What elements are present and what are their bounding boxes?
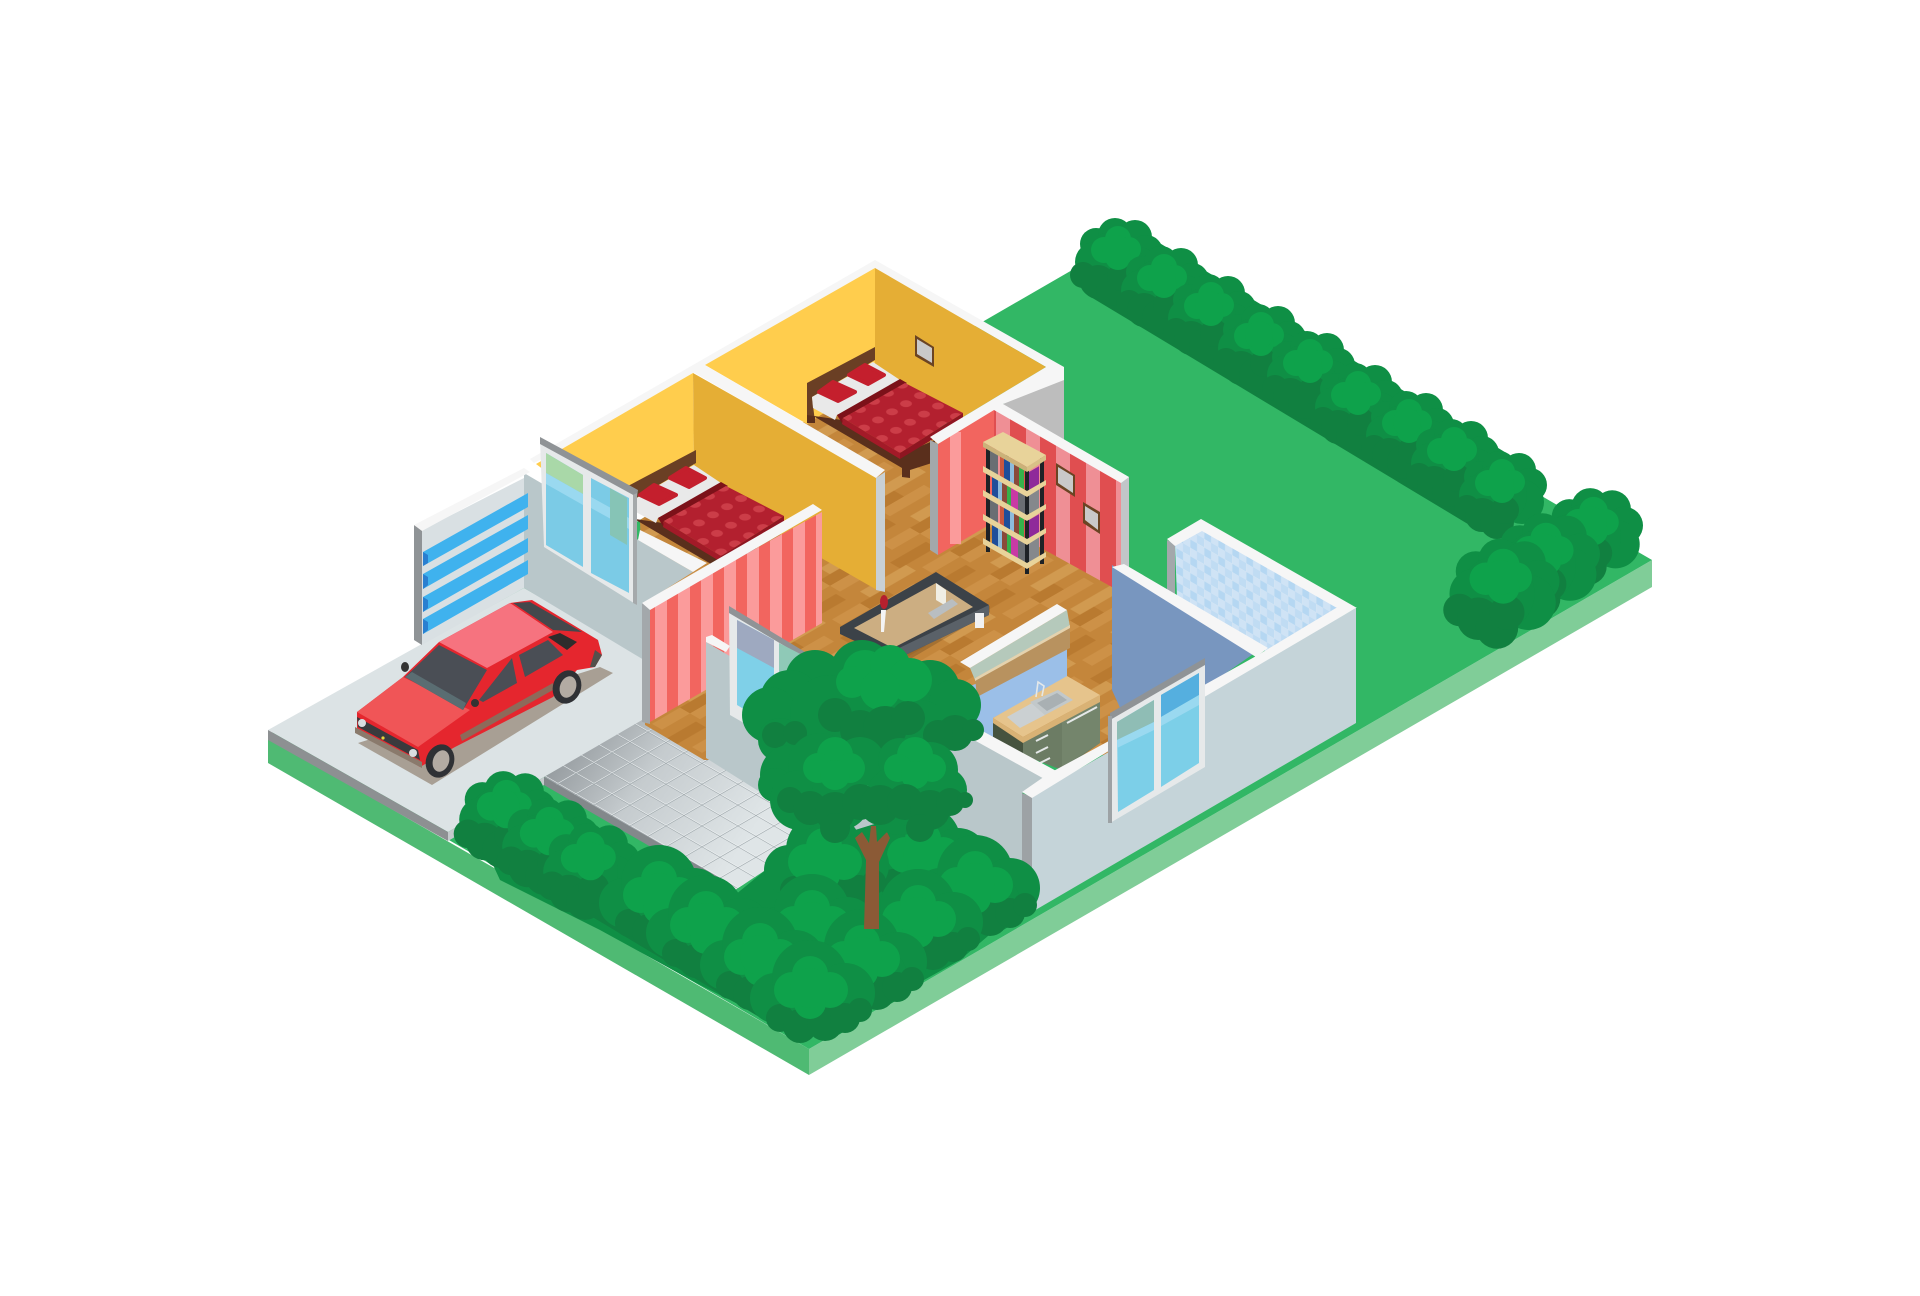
divider wall xyxy=(693,373,877,590)
slats xyxy=(423,493,528,566)
door handle xyxy=(1067,707,1097,723)
front grille xyxy=(357,717,420,760)
cabinet front xyxy=(1023,702,1100,770)
hedge base shade xyxy=(1095,282,1482,515)
rear bumper xyxy=(590,650,602,667)
front wall xyxy=(1022,608,1356,912)
lower canopy xyxy=(758,733,973,843)
picture 2 xyxy=(1083,502,1100,534)
glass band xyxy=(970,610,1070,680)
window: living room xyxy=(729,606,815,764)
paved walkway xyxy=(544,720,830,894)
laptop xyxy=(928,599,958,619)
side strip xyxy=(460,683,553,741)
back hedge xyxy=(1070,218,1643,649)
wooden floor xyxy=(640,378,1140,760)
divider end xyxy=(876,472,885,592)
wall top xyxy=(930,367,1129,483)
front bedroom back wall xyxy=(536,373,694,512)
wing mirror left xyxy=(401,662,409,672)
blue wall xyxy=(1112,565,1256,730)
back post xyxy=(1006,436,1009,546)
wing mirror right xyxy=(471,699,479,707)
back wall xyxy=(960,648,1067,760)
entrance wall xyxy=(706,635,960,905)
picture 1 xyxy=(1056,463,1075,497)
badge xyxy=(381,736,385,740)
shelf boards xyxy=(983,466,1046,497)
window: front bedroom xyxy=(540,437,638,605)
ground: left side xyxy=(268,738,809,1075)
headlights xyxy=(358,719,366,727)
shower wall top xyxy=(1167,519,1357,608)
lawn xyxy=(268,247,1652,1049)
wall top xyxy=(530,260,1064,463)
driveway slab xyxy=(268,588,645,841)
wall top xyxy=(960,604,1067,668)
roof xyxy=(439,603,553,668)
wall picture xyxy=(915,335,934,367)
shower tiles xyxy=(1175,530,1350,652)
back bedroom walls xyxy=(530,260,1064,463)
side window front xyxy=(479,658,517,702)
hedge base mass xyxy=(1130,252,1510,482)
table leg xyxy=(975,613,984,628)
kitchen xyxy=(960,604,1100,770)
front bedroom window wall and side wall xyxy=(524,473,707,660)
wall end left xyxy=(930,440,938,555)
coffee table xyxy=(840,572,990,668)
sink basin xyxy=(1030,690,1073,715)
top board xyxy=(983,432,1046,467)
bumper xyxy=(355,727,422,768)
ground: right side xyxy=(809,560,1652,1075)
hedge base shade xyxy=(480,832,785,1015)
vase xyxy=(881,610,886,632)
quarter window xyxy=(548,633,577,650)
hood xyxy=(357,677,470,747)
posts xyxy=(986,448,990,552)
front wheel xyxy=(421,740,459,782)
windshield xyxy=(405,645,487,710)
divider top xyxy=(693,365,885,478)
bookshelf xyxy=(983,432,1046,574)
front bedroom bed xyxy=(628,450,784,581)
front hedge xyxy=(454,771,1040,1043)
stripe wall at back of living room xyxy=(930,367,1129,592)
bathroom xyxy=(1112,519,1357,730)
slatted panel wall xyxy=(414,468,530,645)
upper canopy xyxy=(742,640,984,762)
faucet xyxy=(1036,682,1044,697)
stripe wall: front of living room xyxy=(642,504,822,724)
hedge base mass xyxy=(470,785,1030,1035)
tree xyxy=(742,640,984,929)
outer grey wall behind back bedroom xyxy=(1003,370,1064,450)
kitchen side wall top xyxy=(965,727,1060,781)
blue wall top xyxy=(1112,564,1268,657)
drawer handles xyxy=(1036,735,1050,763)
flower xyxy=(880,595,888,609)
drawers xyxy=(975,627,1070,697)
shadow xyxy=(358,667,613,785)
shower wall end xyxy=(1167,540,1175,602)
side window rear xyxy=(519,640,563,677)
rear wheel xyxy=(548,666,586,708)
cabinet side xyxy=(993,722,1023,760)
drainer xyxy=(1007,703,1045,728)
corner base mass xyxy=(1505,525,1595,575)
back bedroom bed xyxy=(807,347,963,478)
wall end right xyxy=(1121,477,1129,590)
car xyxy=(355,600,613,785)
body silhouette xyxy=(357,600,602,767)
counter top xyxy=(993,676,1100,737)
trunk xyxy=(855,826,890,929)
grey wall by kitchen xyxy=(950,715,1048,905)
rear window xyxy=(513,602,582,632)
window: front wall xyxy=(1108,658,1205,823)
